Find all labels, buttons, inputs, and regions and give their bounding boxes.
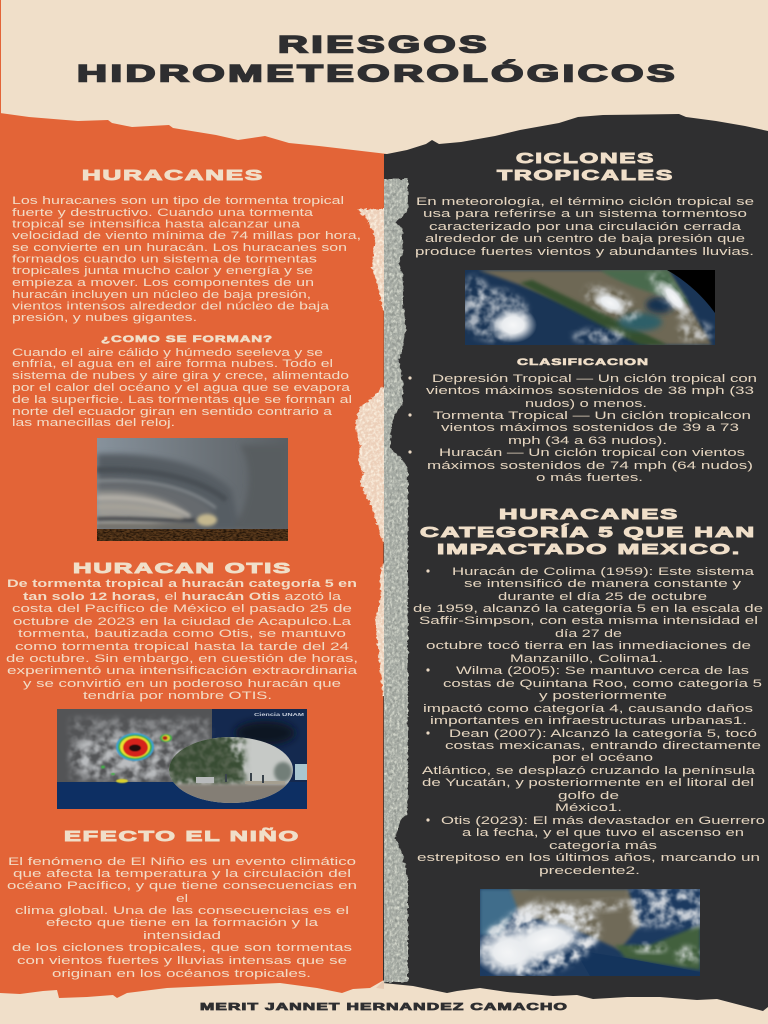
text: efecto el nino: originan en los océanos tropicales. xyxy=(52,968,311,980)
text: huracan otis xyxy=(6,578,358,702)
list: clasificacion: Huracán — Un ciclón tropical con vientos xyxy=(439,447,745,459)
text: efecto el nino: que afecta la temperatura y la circulación del xyxy=(13,868,351,880)
photo: satellite view of cyclones xyxy=(461,266,715,345)
text: huracanes description: formados cuando un sistema de tormentas xyxy=(12,254,317,266)
text: huracanes description: presión, y nubes gigantes. xyxy=(12,312,197,324)
subheading: como se forman: ¿COMO SE FORMAN? xyxy=(101,334,273,345)
list: huracanes categoria 5: México1. xyxy=(555,802,622,814)
list: clasificacion: Depresión Tropical — Un ciclón tropical con xyxy=(432,373,757,385)
list: huracanes categoria 5: de 1959, alcanzó la categoría 5 en la escala de xyxy=(413,603,763,615)
list: huracanes categoria 5: golfo de xyxy=(558,790,619,802)
text: efecto el nino: intensidad xyxy=(143,930,221,942)
list: huracanes categoria 5: día 27 de xyxy=(555,628,622,640)
heading: huracan otis: HURACAN OTIS xyxy=(73,561,292,577)
text: huracan otis: como tormenta tropical hasta la tarde del 24 xyxy=(15,641,349,653)
list: huracanes categoria 5: se intensificó de manera constante y xyxy=(464,578,742,590)
heading: ciclones tropicales: CICLONES xyxy=(516,151,655,167)
text: huracan otis: tendría por nombre OTIS. xyxy=(83,690,272,702)
heading: ciclones tropicales: TROPICALES xyxy=(497,168,674,184)
text: efecto el nino: con vientos fuertes y lluvias intensas que se xyxy=(17,955,347,967)
text: huracanes description: vientos intensos alrededor del núcleo de baja xyxy=(12,300,329,312)
title: RIESGOS xyxy=(278,32,490,58)
text: huracan otis: De tormenta tropical a huracán categoría 5 en xyxy=(7,578,357,590)
text: huracan otis: tan solo 12 horas , el huracán Otis azotó la xyxy=(23,591,341,603)
heading: huracanes categoria 5: HURACANES xyxy=(499,507,679,523)
text: huracan otis: de octubre. Sin embargo, en cuestión de horas, xyxy=(6,653,358,665)
list: clasificacion: Tormenta Tropical — Un ciclón tropicalcon xyxy=(433,410,751,422)
list: clasificacion: vientos máximos sostenidos de 38 mph (33 xyxy=(426,385,754,397)
list: huracanes categoria 5: a la fecha, y el que tuvo el ascenso en xyxy=(462,827,744,839)
list: huracanes categoria 5: Atlántico, se desplazó cruzando la península xyxy=(422,765,755,777)
text: huracan otis: y se convirtió en un poderoso huracán que xyxy=(23,678,341,690)
list: huracanes categoria 5: categoría más xyxy=(549,840,657,852)
text: ciclones description: produce fuertes vientos y abundantes lluvias. xyxy=(415,246,754,258)
photo: otis satellite and flooded street: Ciencia UNAM xyxy=(254,712,304,717)
title xyxy=(77,32,678,88)
text: efecto el nino: de los ciclones tropicales, que son tormentas xyxy=(12,942,352,954)
list: huracanes categoria 5: y posteriormente xyxy=(539,690,667,702)
list: huracanes categoria 5: Huracán de Colima (1959): Este sistema xyxy=(452,566,754,578)
text: huracan otis: experimentó una intensificación extraordinaria xyxy=(7,665,357,677)
text: ciclones description: usa para referirse a un sistema tormentoso xyxy=(423,208,747,220)
text: como se forman: sistema de nubes y aire gira y crece, alimentado xyxy=(12,370,349,382)
list: huracanes categoria 5: durante el día 25 de octubre xyxy=(498,591,707,603)
text: huracanes description: Los huracanes son un tipo de tormenta tropical xyxy=(12,195,344,207)
text: huracanes description: tropical se intensifica hasta alcanzar una xyxy=(12,218,300,230)
list: huracanes categoria 5: por el océano xyxy=(552,752,653,764)
list: huracanes categoria 5: importantes en infraestructuras urbanas1. xyxy=(430,715,747,727)
list: huracanes categoria 5 xyxy=(413,566,765,877)
list: huracanes categoria 5: estrepitoso en los últimos años, marcando un xyxy=(417,852,760,864)
text: como se forman: de la superficie. Las tormentas que se forman al xyxy=(12,394,352,406)
text: huracanes description: tropicales junta mucho calor y energía y se xyxy=(12,265,313,277)
heading: huracanes categoria 5: IMPACTADO MEXICO. xyxy=(437,542,741,558)
text: huracanes description: fuerte y destructivo. Cuando una tormenta xyxy=(12,207,313,219)
text: efecto el nino: El fenómeno de El Niño es un evento climático xyxy=(8,856,356,868)
footer: author: MERIT JANNET HERNANDEZ CAMACHO xyxy=(200,1002,568,1013)
text: como se forman: Cuando el aire cálido y húmedo seeleva y se xyxy=(12,347,323,359)
text: ciclones description xyxy=(415,196,754,258)
heading: huracanes categoria 5: CATEGORÍA 5 QUE HAN xyxy=(420,524,756,541)
list: clasificacion: nudos) o menos. xyxy=(525,398,647,410)
title: HIDROMETEOROLÓGICOS xyxy=(77,60,678,88)
text: ciclones description: alrededor de un centro de baja presión que xyxy=(425,233,745,245)
list: huracanes categoria 5: Saffir-Simpson, con esta misma intensidad el xyxy=(419,615,758,627)
text: huracanes description xyxy=(12,195,361,324)
list: clasificacion: vientos máximos sostenidos de 39 a 73 xyxy=(441,422,739,434)
text: como se forman: las manecillas del reloj. xyxy=(12,417,175,429)
text: como se forman: por el calor del océano y el agua que se evapora xyxy=(12,382,350,394)
text: ciclones description: En meteorología, el término ciclón tropical se xyxy=(416,196,754,208)
text: huracanes description: velocidad de viento mínima de 74 millas por hora, xyxy=(12,230,361,242)
text: como se forman xyxy=(12,347,352,429)
list: huracanes categoria 5: costas de Quintana Roo, como categoría 5 xyxy=(443,678,762,690)
heading: ciclones tropicales xyxy=(497,151,674,184)
panel: dark right column xyxy=(383,114,768,1011)
heading: efecto el nino: EFECTO EL NIÑO xyxy=(64,827,300,845)
photo: satellite view of hurricane over mexico xyxy=(480,889,700,976)
text: ciclones description: caracterizado por una circulación cerrada xyxy=(429,221,741,233)
text: como se forman: enfría, el agua en el aire forma nubes. Todo el xyxy=(12,358,333,370)
torn paper strip xyxy=(355,179,408,989)
heading: huracanes categoria 5 xyxy=(420,507,756,558)
list: huracanes categoria 5: Wilma (2005): Se mantuvo cerca de las xyxy=(456,665,749,677)
list: huracanes categoria 5: precedente2. xyxy=(539,865,640,877)
heading: huracanes: HURACANES xyxy=(82,168,264,184)
panel: orange left column xyxy=(0,113,387,998)
list: huracanes categoria 5: Otis (2023): El más devastador en Guerrero xyxy=(441,815,765,827)
text: huracanes description: se convierte en un huracán. Los huracanes son xyxy=(12,242,347,254)
text: como se forman: norte del ecuador giran en sentido contrario a xyxy=(12,406,332,418)
list: clasificacion: máximos sostenidos de 74 mph (64 nudos) xyxy=(427,460,753,472)
text: efecto el nino xyxy=(7,856,357,980)
list: huracanes categoria 5: de Yucatán, y posteriormente en el litoral del xyxy=(422,777,754,789)
text: huracanes description: huracán incluyen un núcleo de baja presión, xyxy=(12,289,311,301)
photo: otis satellite and flooded street xyxy=(57,709,307,809)
text: huracanes description: empieza a mover. Los componentes de un xyxy=(12,277,314,289)
text: efecto el nino: efecto que tiene en la formación y la xyxy=(46,917,318,929)
subheading: clasificacion: CLASIFICACION xyxy=(517,357,649,368)
list: clasificacion xyxy=(408,373,757,484)
list: huracanes categoria 5: costas mexicanas, entrando directamente xyxy=(445,740,761,752)
list: clasificacion: o más fuertes. xyxy=(536,472,643,484)
text: efecto el nino: océano Pacífico, y que tiene consecuencias en xyxy=(7,880,357,892)
list: huracanes categoria 5: Dean (2007): Alcanzó la categoría 5, tocó xyxy=(449,728,757,740)
list: huracanes categoria 5: octubre tocó tierra en las inmediaciones de xyxy=(426,640,751,652)
list: clasificacion: mph (34 a 63 nudos). xyxy=(508,435,667,447)
photo: supercell storm xyxy=(97,438,288,541)
text: efecto el nino: clima global. Una de las consecuencias es el xyxy=(15,905,349,917)
list: huracanes categoria 5: Manzanillo, Colima1. xyxy=(510,653,663,665)
list: huracanes categoria 5: impactó como categoría 4, causando daños xyxy=(423,703,753,715)
text: huracan otis: octubre de 2023 en la ciudad de Acapulco.La xyxy=(13,616,351,628)
text: huracan otis: tormenta, bautizada como Otis, se mantuvo xyxy=(18,628,346,640)
text: huracan otis: costa del Pacífico de México el pasado 25 de xyxy=(12,603,352,615)
text: efecto el nino: el xyxy=(176,893,188,905)
